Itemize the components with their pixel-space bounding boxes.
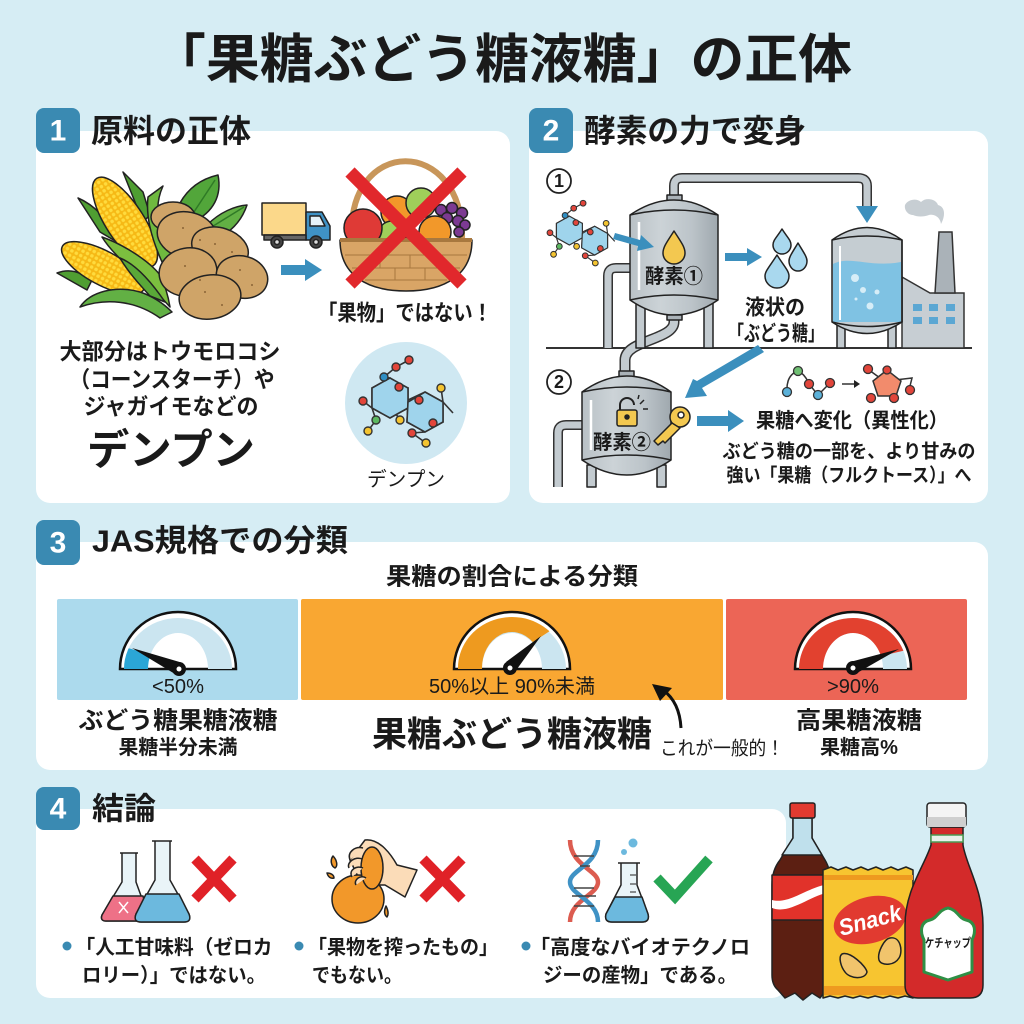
ground line [546,347,972,349]
bullet text 1: ロリー）」ではない。 [82,964,266,987]
icon: truck [262,203,330,248]
label enzyme 1: 酵素① [645,265,703,288]
caption: starch: デンプン [367,468,445,491]
label low: ぶどう糖果糖液糖 [78,708,278,734]
icon: flask [606,838,648,922]
gauge middle [429,612,595,698]
label enzyme 2: 酵素② [593,431,651,454]
curved arrow [652,684,681,728]
heading 4: 結論 [92,792,156,826]
gauge middle: 50%以上 90%未満 [429,675,595,698]
diagonal arrow [685,345,764,398]
gauge high [795,612,911,698]
badge 3 [36,520,80,565]
badge 4 [36,787,80,830]
text block: starch source: ジャガイモなどの [84,394,258,420]
text: explanation: 強い「果糖（フルクトース）」へ [726,464,972,486]
gauge low: <50% [152,676,204,698]
factory [902,199,964,348]
label liquid glucose: 液状の [745,296,805,320]
badge 1 [36,108,80,153]
text block: starch source: 大部分はトウモロコシ [60,340,280,364]
small molecule [547,200,615,266]
bullet text 1: 「人工甘味料（ゼロカ [76,935,272,959]
heading 2: 酵素の力で変身 [584,113,806,149]
arrow to tank 1 [613,233,654,251]
gauge high: >90% [827,676,879,698]
arrow into tank [856,206,878,223]
step marker 1: 1 [554,171,564,191]
icon: flasks [102,841,190,922]
label liquid glucose: 「ぶどう糖」 [728,322,824,346]
text: explanation [722,440,976,486]
label low [78,708,278,759]
icon: leaves [180,175,247,236]
text block: starch source: （コーンスターチ）や [70,368,274,392]
key [670,407,690,427]
step marker 2: 2 [554,372,564,392]
step marker 2 [547,370,571,394]
text: ketchup: ケチャップ [925,936,971,950]
bullet text 2 [294,936,498,987]
label high: 果糖高% [820,736,898,759]
note: common: これが一般的！ [660,738,784,760]
text: Snack: Snack [836,899,905,941]
icon: red cross [350,172,462,284]
icon: DNA [570,840,598,922]
panel: 4 conclusion [36,787,786,998]
molecule circle [345,342,467,464]
text block: starch source: デンプン [87,426,255,474]
label high [796,708,922,759]
panel: 3 JAS classification [36,520,988,770]
icon: hand squeezing orange [327,840,417,923]
title: 「果糖ぶどう糖液糖」の正体 [152,30,852,90]
bullet text 3 [522,936,750,987]
tank 1 [630,195,718,348]
top pipe [674,178,867,210]
heading 1: 原料の正体 [91,113,251,149]
caption: not fruit: 「果物」ではない！ [318,300,492,326]
label middle: 果糖ぶどう糖液糖 [372,716,652,754]
bullet text 3: 「高度なバイオテクノロ [530,936,750,959]
icon: potatoes [151,202,273,323]
panel: 2 enzymes [529,108,988,503]
bullet text 2: でもない。 [312,964,402,987]
arrow to droplets [725,248,762,266]
badge 4: 4 [50,792,67,826]
arrow to fructose [697,410,744,432]
tank 2 [582,371,690,487]
droplets [765,229,807,288]
bullet text 3: ジーの産物」である。 [543,964,737,987]
step marker 1 [547,169,571,193]
isomerization diagram [782,364,914,402]
text: change to fructose: 果糖へ変化（異性化） [756,410,948,432]
gauge low [120,612,236,698]
panel: 1 raw materials [36,108,510,503]
pipe left tank 1 [608,268,632,348]
label high: 高果糖液糖 [796,708,922,734]
badge 3: 3 [50,526,66,560]
badge 2: 2 [543,114,559,148]
product: cola bottle [772,803,831,1000]
product: ketchup bottle [905,803,983,998]
heading 3: JAS規格での分類 [92,524,348,558]
product: snack bag [823,867,913,998]
subheading: 果糖の割合による分類 [386,564,638,590]
badge 2 [529,108,573,153]
category bar: high [726,599,967,700]
label liquid glucose [728,296,824,346]
bullet text 2: 「果物を搾ったもの」 [308,936,498,959]
tank: blue [832,228,902,348]
bullet text 1 [62,935,272,987]
drop [663,231,685,264]
icon: check mark [657,859,709,897]
category bar: low [57,599,298,700]
padlock [620,398,634,410]
arrow [281,259,322,281]
icon: red cross 1 [195,859,233,899]
icon: red cross 2 [423,859,462,899]
text: explanation: ぶどう糖の一部を、より甘みの [722,440,976,462]
pipe S bend [625,315,674,375]
pipe left tank 2 [558,425,585,487]
badge 1: 1 [50,114,66,148]
icon: fruit basket [340,161,472,291]
category bar: middle [301,599,723,700]
text block: starch source [60,340,280,474]
icon: corn [54,168,173,318]
label low: 果糖半分未満 [118,736,238,759]
